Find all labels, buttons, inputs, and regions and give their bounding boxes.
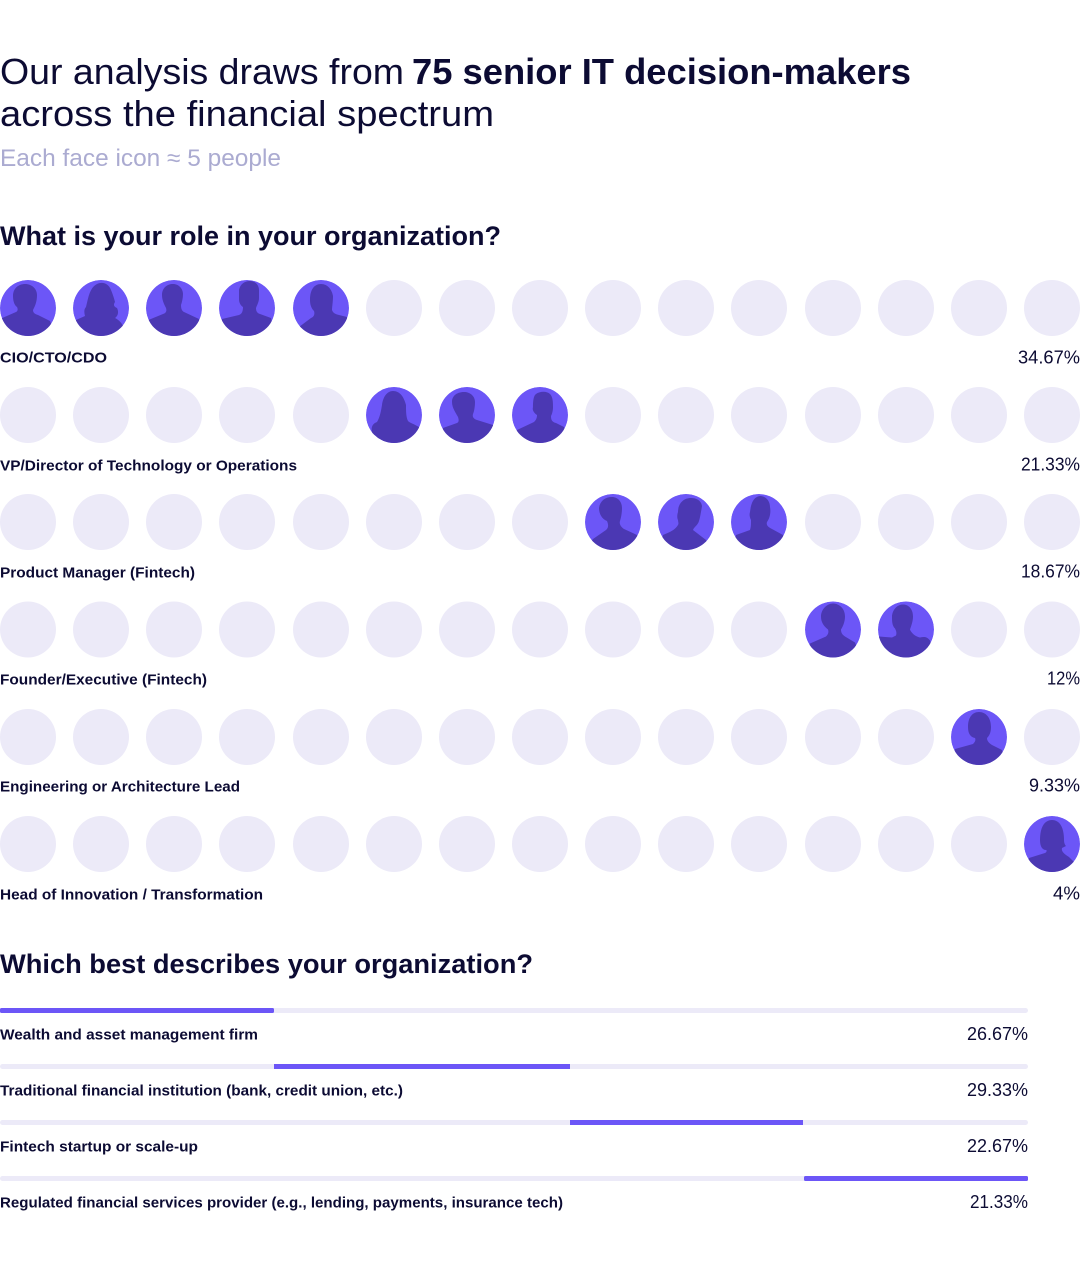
bar track and segment [0, 1008, 1028, 1013]
icon: face 12 [805, 602, 861, 658]
value: 9.33% [1029, 776, 1080, 796]
icon: face 7 [439, 387, 495, 443]
heading: role question: What is your role in your organization? [0, 221, 501, 251]
empty face placeholders [0, 816, 1007, 872]
bar track and segment [0, 1064, 1028, 1069]
icon: face 11 [731, 494, 787, 550]
row: VP/Director [0, 387, 1080, 474]
row: traditional financial institution [0, 1064, 1028, 1100]
value: 29.33% [967, 1080, 1028, 1100]
label: CIO/CTO/CDO [0, 350, 107, 366]
empty face placeholders [0, 387, 1080, 443]
label: Fintech startup or scale-up [0, 1138, 198, 1156]
title: 75 senior IT decision-makers [412, 51, 911, 92]
title: across the financial spectrum [0, 93, 494, 134]
icon: face 5 [293, 280, 349, 336]
label: Engineering or Architecture Lead [0, 778, 240, 796]
row: CIO/CTO/CDO [0, 280, 1080, 368]
icon: face 9 [585, 494, 641, 550]
label: Wealth and asset management firm [0, 1026, 258, 1044]
row: Head of Innovation [0, 816, 1080, 904]
icon: face 15 [1024, 816, 1080, 872]
icon: face 8 [512, 387, 568, 443]
empty face placeholders [0, 494, 1080, 550]
row: Engineering or Architecture Lead [0, 709, 1080, 796]
label: Regulated financial services provider (e.g., lending, payments, insurance tech) [0, 1194, 563, 1212]
icon: face 3 [146, 280, 202, 336]
icon: face 6 [366, 387, 422, 443]
value: 26.67% [967, 1024, 1028, 1044]
empty face placeholders [366, 280, 1080, 336]
heading: organization question: Which best describes your organization? [0, 949, 533, 979]
value: 34.67% [1018, 348, 1080, 368]
title [0, 51, 911, 134]
empty face placeholders [0, 602, 1080, 658]
label: Product Manager (Fintech) [0, 564, 195, 582]
icon: face 13 [878, 602, 934, 658]
icon: face 14 [951, 709, 1007, 765]
label: VP/Director of Technology or Operations [0, 458, 297, 474]
icon: face 2 [73, 280, 129, 336]
row: Product Manager [0, 494, 1080, 582]
panel: organization segmented bars [0, 1008, 1028, 1212]
title: Our analysis draws from [0, 51, 404, 92]
label: Traditional financial institution (bank, credit union, etc.) [0, 1082, 403, 1100]
panel: role pictogram rows [0, 280, 1080, 904]
icon: face 1 [0, 280, 56, 336]
bar track and segment [0, 1120, 1028, 1125]
icon: face 10 [658, 494, 714, 550]
icon: face 4 [219, 280, 275, 336]
value: 4% [1053, 884, 1080, 904]
row: wealth and asset management [0, 1008, 1028, 1044]
row: regulated financial services [0, 1176, 1028, 1212]
value: 21.33% [970, 1192, 1028, 1212]
row: fintech startup [0, 1120, 1028, 1156]
bar track and segment [0, 1176, 1028, 1181]
empty face placeholders [0, 709, 1080, 765]
label: Founder/Executive (Fintech) [0, 672, 207, 688]
label: Head of Innovation / Transformation [0, 886, 263, 904]
value: 22.67% [967, 1136, 1028, 1156]
subtitle: Each face icon ≈ 5 people [0, 145, 281, 172]
row: Founder/Executive [0, 602, 1080, 688]
